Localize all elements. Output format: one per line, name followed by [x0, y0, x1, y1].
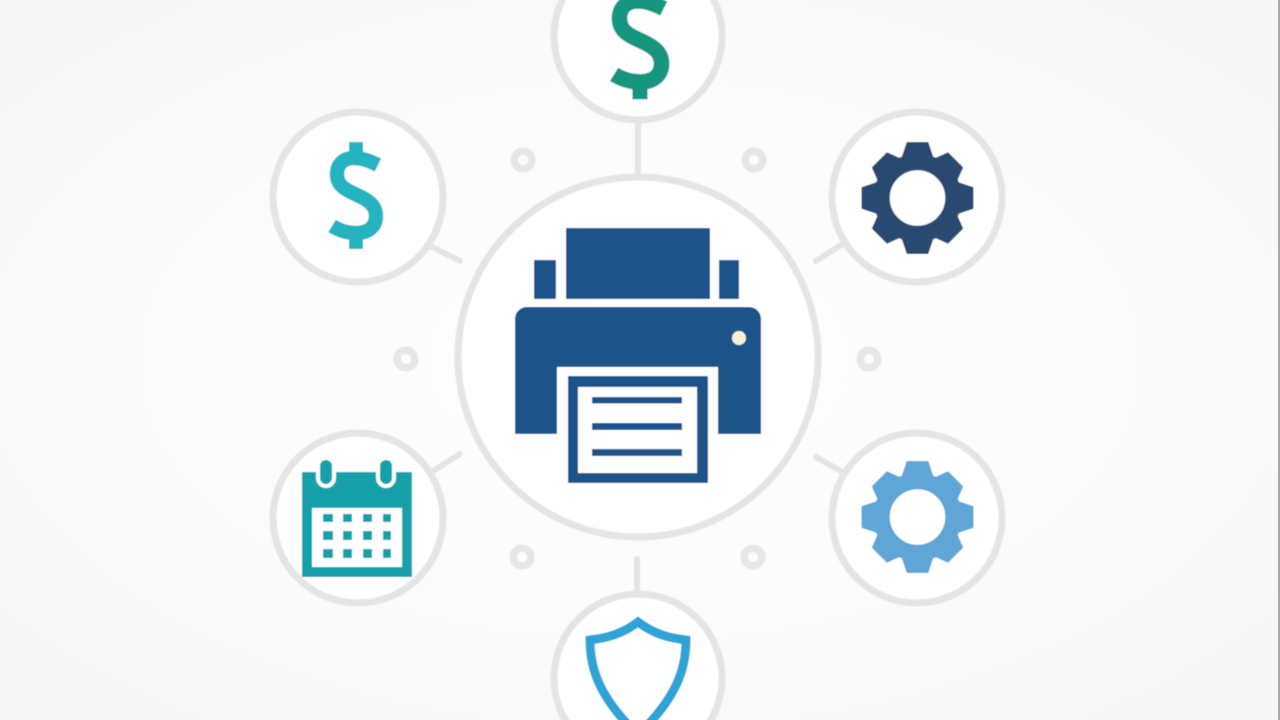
icon: teal dollar	[332, 142, 378, 249]
icon: printer	[515, 228, 761, 483]
icon: green dollar	[614, 0, 664, 99]
icon: calendar	[302, 458, 412, 577]
satellite: top dollar	[554, 0, 722, 120]
satellite: upper-left dollar	[273, 112, 443, 282]
connector lines	[432, 122, 844, 592]
satellite: lower-left calendar	[273, 433, 443, 603]
satellite: lower-right gear	[832, 433, 1002, 603]
decorative small rings	[397, 151, 878, 566]
icon: shield	[590, 622, 686, 720]
central printer panel	[458, 177, 818, 537]
satellite: upper-right gear	[832, 112, 1002, 282]
satellite: bottom shield	[554, 594, 722, 720]
icon: light blue gear	[862, 462, 972, 572]
icon: dark gear	[862, 143, 972, 253]
